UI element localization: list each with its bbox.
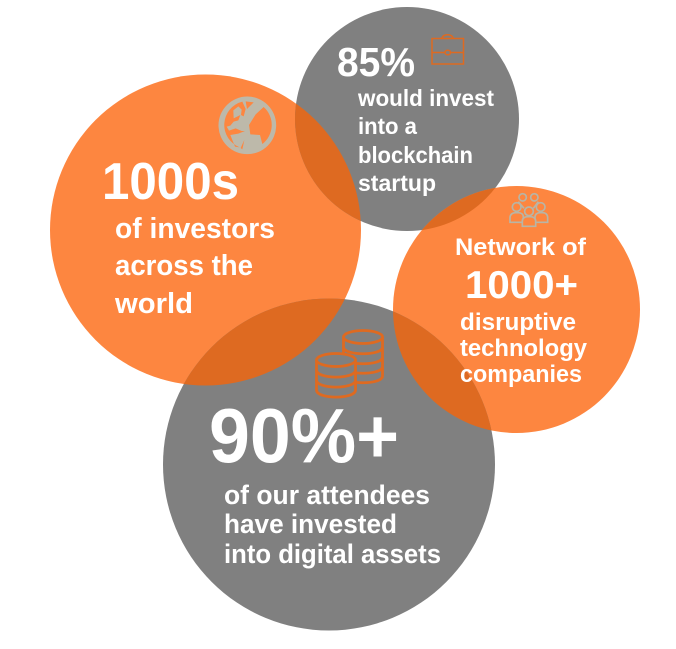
circle: 85% gray xyxy=(295,7,519,231)
text: 1000s of investors across the world: of investors xyxy=(115,213,275,245)
circle overlaps xyxy=(184,104,496,430)
text: 85% would invest into a blockchain startup: 85% xyxy=(337,39,415,85)
circle: investors orange xyxy=(50,74,361,386)
text: network of 1000+ disruptive technology companies xyxy=(455,234,588,388)
circle: network orange xyxy=(393,186,640,433)
text: 1000s of investors across the world: world xyxy=(114,288,193,320)
text: 85% would invest into a blockchain startup: into a xyxy=(358,113,417,139)
text: network of 1000+ disruptive technology companies: Network of xyxy=(455,234,587,261)
text: 90%+ of our attendees have invested into digital assets xyxy=(209,394,441,569)
text: 90%+ of our attendees have invested into digital assets: of our attendees xyxy=(224,480,430,510)
text: 1000s of investors across the world: 1000s xyxy=(102,153,239,211)
text: 90%+ of our attendees have invested into digital assets: into digital assets xyxy=(224,539,441,569)
text: 1000s of investors across the world xyxy=(102,153,275,320)
text: 85% would invest into a blockchain startup: would invest xyxy=(357,85,494,111)
text: network of 1000+ disruptive technology companies: 1000+ xyxy=(465,264,578,307)
text: 90%+ of our attendees have invested into digital assets: have invested xyxy=(224,509,397,539)
text: 1000s of investors across the world: across the xyxy=(115,250,253,282)
icon: briefcase xyxy=(432,35,464,64)
icon: people group xyxy=(510,194,548,226)
circle: 90% gray xyxy=(163,298,495,630)
text: network of 1000+ disruptive technology companies: companies xyxy=(460,361,582,388)
icon: coin stacks xyxy=(316,330,382,397)
text: 85% would invest into a blockchain startup xyxy=(337,39,494,196)
text: network of 1000+ disruptive technology companies: disruptive xyxy=(460,309,576,336)
icon: globe xyxy=(218,96,276,154)
text: 85% would invest into a blockchain startup: startup xyxy=(358,170,436,196)
text: 90%+ of our attendees have invested into digital assets: 90%+ xyxy=(209,394,399,480)
text: network of 1000+ disruptive technology companies: technology xyxy=(460,335,588,362)
text: 85% would invest into a blockchain startup: blockchain xyxy=(358,142,473,168)
